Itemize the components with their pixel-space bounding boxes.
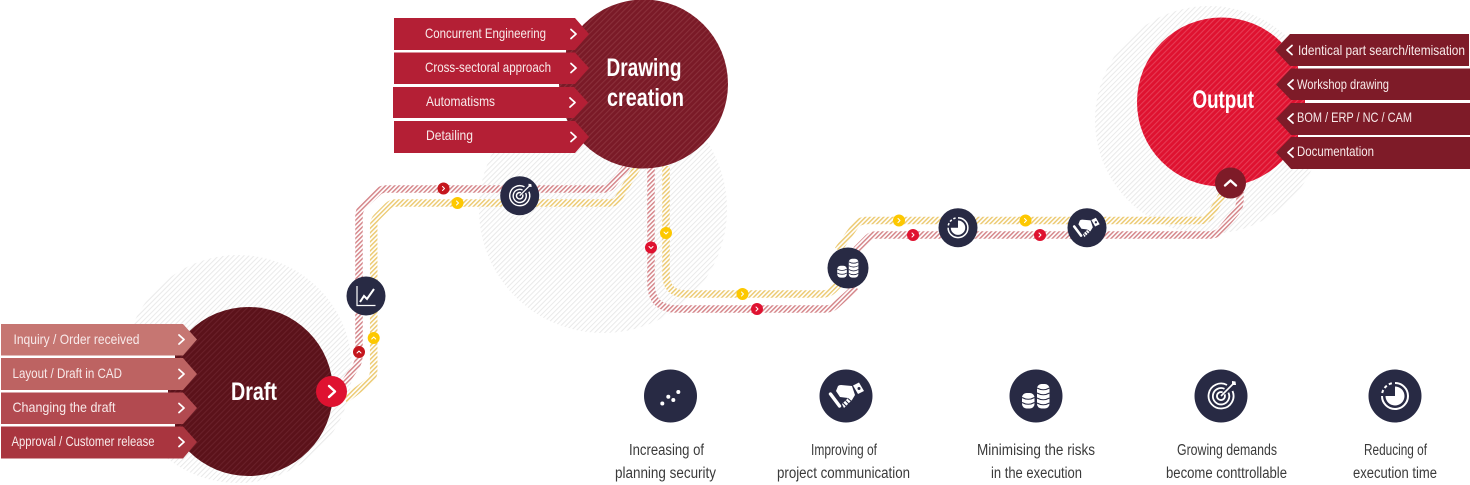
track direction markers — [353, 182, 1046, 358]
hatched backdrop circle: output — [1095, 6, 1323, 234]
output step: documentation: Documentation — [1297, 143, 1374, 159]
output circle — [1137, 18, 1306, 186]
output title: Output — [1192, 86, 1254, 114]
caption: risks in the execution: in the execution — [991, 465, 1082, 482]
output step: BOM ERP NC CAM: BOM / ERP / NC / CAM — [1297, 109, 1412, 125]
icon: target — [1194, 370, 1248, 422]
drawing creation title: creation — [607, 84, 684, 112]
output step: workshop drawing: Workshop drawing — [1297, 76, 1389, 92]
drawing step: automatisms: Automatisms — [426, 93, 495, 109]
benefit: growing demands — [1166, 370, 1287, 482]
drawing step: concurrent engineering: Concurrent Engineering — [425, 25, 546, 41]
caption: risks in the execution: Minimising the risks — [977, 442, 1095, 459]
benefit: planning security — [615, 370, 716, 482]
draft circle — [164, 307, 333, 476]
output step: documentation — [1276, 137, 1470, 169]
panel: draft — [1, 307, 347, 476]
track icon: line chart — [346, 276, 386, 316]
yellow track: drawing creation to output — [666, 166, 1224, 294]
hatched backdrop circle: drawing creation — [479, 85, 727, 333]
draft step: approval — [1, 426, 197, 458]
draft step: inquiry — [1, 324, 197, 356]
icon: clock — [1368, 370, 1422, 422]
yellow track: draft to drawing creation — [345, 166, 638, 400]
hatched backdrop circle: draft — [124, 255, 352, 483]
caption: execution time: Reducing of — [1364, 442, 1428, 459]
icon: handshake — [820, 370, 872, 422]
caption: planning security: planning security — [615, 465, 716, 482]
track icon: handshake — [1068, 208, 1106, 247]
red track: drawing creation to output — [651, 166, 1240, 309]
caption: execution time: execution time — [1353, 465, 1437, 482]
draft step: changing — [1, 392, 197, 424]
drawing step: detailing: Detailing — [426, 127, 473, 143]
draft step: layout: Layout / Draft in CAD — [12, 365, 122, 381]
benefit: risks in the execution — [977, 370, 1095, 482]
benefit: execution time — [1353, 370, 1437, 482]
drawing creation circle — [559, 0, 728, 168]
draft title: Draft — [231, 378, 278, 406]
panel: drawing creation — [393, 0, 728, 168]
icon: coins — [1010, 370, 1062, 422]
output step: workshop drawing — [1276, 68, 1470, 100]
caption: project communication: Improving of — [811, 442, 878, 459]
draft step: inquiry: Inquiry / Order received — [14, 331, 140, 347]
icon: scattered dots — [644, 370, 697, 422]
drawing step: automatisms — [393, 87, 588, 118]
output step: identical part search — [1275, 34, 1469, 66]
panel: output — [1137, 18, 1470, 198]
track icon: target — [500, 176, 539, 215]
caption: growing demands: Growing demands — [1177, 442, 1277, 459]
caption: growing demands: become conttrollable — [1166, 465, 1287, 482]
draft bar gaps — [1, 356, 175, 426]
drawing step: cross-sectoral approach: Cross-sectoral approach — [425, 59, 551, 75]
drawing bar gaps — [394, 50, 566, 121]
draft step: layout — [1, 358, 197, 390]
drawing step: cross-sectoral approach — [394, 52, 589, 84]
drawing step: concurrent engineering — [394, 18, 589, 50]
track icon: clock — [938, 208, 978, 247]
draft connector button — [316, 376, 347, 407]
caption: project communication: project communication — [777, 465, 910, 482]
drawing step: detailing — [394, 121, 589, 153]
output connector button — [1215, 168, 1246, 198]
track icon: coins — [828, 248, 868, 288]
caption: planning security: Increasing of — [629, 442, 705, 459]
output step: BOM ERP NC CAM — [1276, 103, 1470, 135]
draft step: approval: Approval / Customer release — [12, 433, 155, 449]
benefit: project communication — [777, 370, 910, 482]
red track: draft to drawing creation — [343, 166, 627, 385]
draft step: changing: Changing the draft — [12, 399, 116, 415]
drawing creation title: Drawing — [606, 54, 682, 82]
output bar gaps — [1298, 66, 1470, 137]
